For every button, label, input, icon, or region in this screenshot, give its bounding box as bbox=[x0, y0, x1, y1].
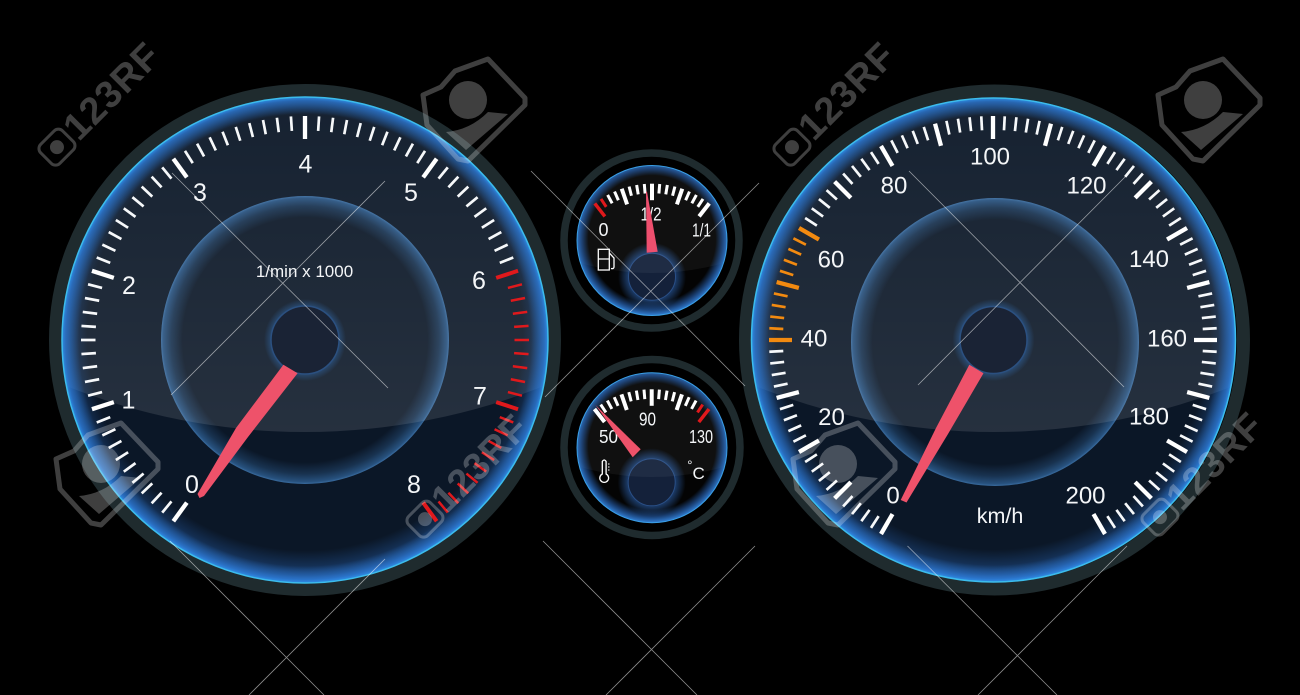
watermarks bbox=[31, 35, 1272, 545]
tachometer hub bbox=[271, 306, 339, 374]
speedometer white major ticks bbox=[777, 116, 1217, 534]
speedometer scale numbers: 200 bbox=[1065, 482, 1106, 510]
speedometer unit label: km/h bbox=[977, 504, 1023, 528]
speedometer hub glow bbox=[952, 299, 1034, 381]
watermark: logo text lower right bbox=[1134, 405, 1272, 543]
speedometer scale numbers: 0 bbox=[886, 482, 900, 510]
fuel dial face bbox=[577, 166, 727, 316]
tachometer scale numbers: 1 bbox=[122, 386, 135, 414]
panel: tachometer gauge bbox=[49, 84, 561, 596]
watermark: logo text lower middle bbox=[399, 407, 537, 545]
temperature needle bbox=[596, 405, 641, 457]
temperature scale numbers: 130 bbox=[689, 427, 713, 447]
fuel scale numbers: 1/2 bbox=[640, 204, 662, 224]
watermark: logo text top right bbox=[766, 35, 904, 173]
speedometer gloss reflection bbox=[759, 111, 1228, 432]
fuel scale numbers: 0 bbox=[598, 220, 609, 240]
tachometer hub glow bbox=[264, 299, 346, 381]
speedometer scale numbers: 60 bbox=[818, 246, 844, 274]
speedometer hub bbox=[960, 306, 1027, 374]
watermark: logo text top left bbox=[31, 35, 169, 173]
speedometer scale numbers: 20 bbox=[818, 404, 845, 431]
speedometer white minor ticks bbox=[765, 112, 1221, 531]
tachometer white major ticks bbox=[92, 116, 437, 521]
watermark: icon top right bbox=[1158, 59, 1260, 161]
tachometer scale numbers bbox=[122, 150, 487, 499]
watermark diagonal lines bbox=[170, 171, 1127, 695]
speedometer dial face bbox=[752, 98, 1236, 582]
temperature unit label: C bbox=[692, 464, 705, 483]
tachometer scale numbers: 5 bbox=[404, 179, 418, 207]
tachometer scale numbers: 3 bbox=[193, 179, 207, 207]
fuel scale ticks bbox=[595, 182, 709, 216]
speedometer bezel ring bbox=[746, 91, 1244, 589]
speedometer rim glow bbox=[752, 98, 1236, 582]
temperature scale numbers: 90 bbox=[639, 410, 656, 430]
fuel scale numbers: 1/1 bbox=[692, 220, 711, 240]
temperature hub bbox=[628, 459, 675, 506]
speedometer scale numbers bbox=[801, 144, 1187, 510]
tachometer scale numbers: 7 bbox=[473, 382, 487, 410]
tachometer red zone ticks bbox=[423, 271, 555, 523]
temperature scale numbers: 50 bbox=[599, 427, 618, 447]
speedometer scale numbers: 120 bbox=[1066, 172, 1107, 200]
fuel hub bbox=[628, 253, 676, 300]
watermark: icon top middle bbox=[423, 59, 525, 161]
temperature bezel ring bbox=[564, 360, 740, 536]
tachometer gloss reflection bbox=[70, 110, 540, 432]
tachometer unit label: 1/min x 1000 bbox=[256, 262, 353, 281]
temperature hub glow bbox=[618, 448, 686, 516]
speedometer scale numbers: 100 bbox=[970, 144, 1010, 170]
temperature unit label: ° bbox=[687, 458, 692, 472]
watermark: icon lower right bbox=[793, 423, 895, 525]
tachometer scale numbers: 0 bbox=[185, 471, 199, 499]
fuel needle bbox=[646, 192, 658, 253]
temperature dial face bbox=[577, 373, 727, 523]
speedometer scale numbers: 160 bbox=[1147, 326, 1187, 352]
fuel scale numbers bbox=[598, 204, 711, 240]
tachometer rim glow bbox=[62, 97, 548, 583]
tachometer scale numbers: 6 bbox=[472, 267, 486, 295]
fuel bezel ring bbox=[564, 153, 739, 328]
tachometer bezel ring bbox=[56, 90, 554, 590]
speedometer orange ticks bbox=[769, 228, 819, 340]
tachometer dial face bbox=[62, 97, 548, 583]
tachometer white minor ticks bbox=[55, 89, 534, 513]
temperature rim glow bbox=[577, 373, 727, 523]
speedometer scale numbers: 40 bbox=[801, 326, 827, 352]
fuel gloss reflection bbox=[584, 172, 720, 273]
panel: fuel gauge bbox=[560, 149, 743, 332]
speedometer needle bbox=[901, 365, 984, 502]
panel: speedometer gauge bbox=[739, 84, 1250, 596]
temperature scale numbers bbox=[599, 410, 713, 447]
speedometer inner disc bbox=[851, 198, 1139, 486]
tachometer rim edge bbox=[62, 97, 548, 583]
tachometer scale numbers: 2 bbox=[122, 272, 136, 300]
tachometer inner disc bbox=[161, 196, 449, 484]
fuel hub glow bbox=[618, 243, 686, 311]
temperature scale ticks bbox=[594, 387, 709, 422]
speedometer scale numbers: 140 bbox=[1129, 246, 1169, 273]
tachometer scale numbers: 4 bbox=[299, 150, 313, 178]
speedometer rim edge bbox=[752, 98, 1236, 582]
icon: fuel pump bbox=[598, 249, 614, 270]
tachometer needle bbox=[198, 365, 298, 498]
watermark: icon lower left bbox=[56, 423, 158, 525]
tachometer scale numbers: 8 bbox=[407, 471, 421, 499]
speedometer scale numbers: 80 bbox=[881, 172, 907, 200]
speedometer scale numbers: 180 bbox=[1129, 404, 1169, 430]
fuel rim glow bbox=[577, 166, 727, 316]
icon: thermometer bbox=[600, 460, 610, 482]
temperature gloss reflection bbox=[584, 378, 720, 477]
panel: temperature gauge bbox=[560, 356, 744, 540]
